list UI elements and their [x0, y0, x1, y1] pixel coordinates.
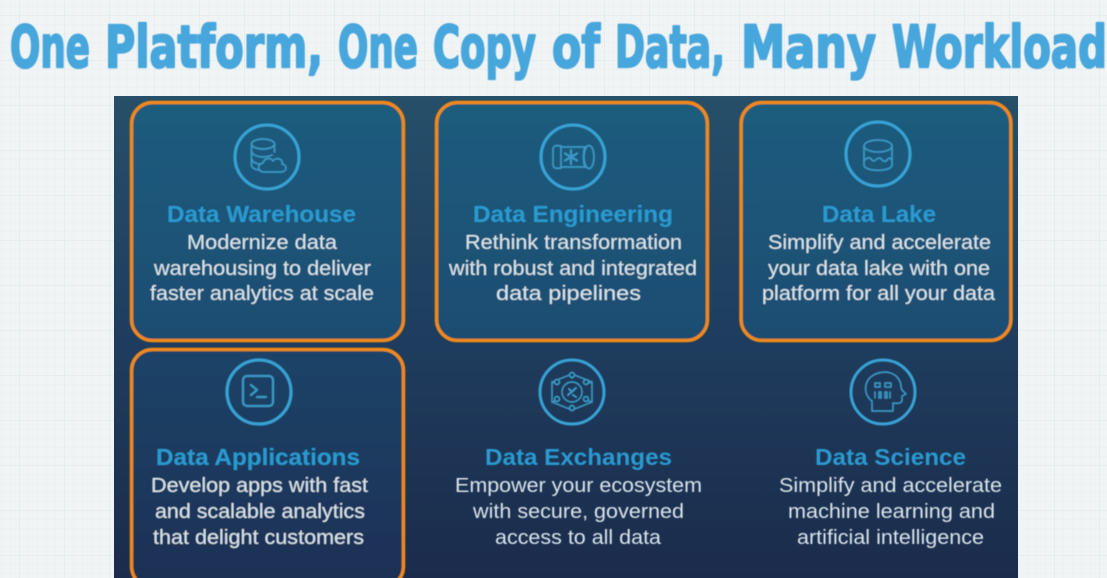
description: Data Science: artificial intelligence [797, 526, 984, 549]
description: Data Warehouse: warehousing to deliver [153, 257, 371, 280]
icon: exchange network [540, 360, 604, 424]
description: Data Engineering: Rethink transformation [465, 231, 682, 254]
title: Many [741, 13, 876, 81]
title: Platform, [105, 13, 323, 81]
heading: Data Lake: Data Lake [822, 201, 936, 227]
description: Data Engineering [448, 231, 697, 305]
title [10, 13, 1107, 81]
card outline: Data Warehouse [132, 102, 404, 340]
title: Copy [433, 13, 536, 81]
title: One [10, 13, 90, 81]
description: Data Lake [762, 231, 996, 305]
description: Data Lake: your data lake with one [768, 257, 990, 280]
description: Data Exchanges: Empower your ecosystem [455, 474, 702, 497]
heading: Data Exchanges: Data Exchanges [485, 444, 672, 470]
title: One [338, 13, 418, 81]
description: Data Science: machine learning and [788, 500, 995, 523]
description: Data Applications [151, 474, 368, 549]
dark slide panel [114, 96, 1018, 578]
icon: terminal prompt [227, 360, 291, 424]
icon: database with cloud [235, 125, 299, 189]
card outline: Data Engineering [436, 102, 708, 340]
panel: Data Warehouse [132, 102, 404, 340]
panel: Data Science [779, 360, 1002, 549]
icon: head with data [851, 360, 915, 424]
heading: Data Science: Data Science [815, 444, 966, 470]
title: Data, [615, 13, 725, 81]
description: Data Exchanges [455, 474, 702, 549]
description: Data Science: Simplify and accelerate [779, 474, 1002, 497]
description: Data Lake: Simplify and accelerate [768, 231, 991, 254]
description: Data Engineering: data pipelines [496, 282, 641, 305]
heading: Data Warehouse: Data Warehouse [167, 201, 356, 227]
icon: pipeline with snowflake [541, 125, 605, 189]
description: Data Science [779, 474, 1002, 549]
description: Data Engineering: with robust and integrated [448, 257, 697, 280]
description: Data Lake: platform for all your data [762, 282, 996, 305]
panel: Data Applications [132, 350, 404, 578]
description: Data Applications: and scalable analytics [155, 500, 365, 523]
description: Data Warehouse [150, 231, 374, 305]
description: Data Exchanges: with secure, governed [472, 500, 684, 523]
card outline: Data Applications [132, 350, 404, 578]
description: Data Applications: that delight customers [153, 526, 364, 549]
panel: Data Exchanges [455, 360, 702, 549]
description: Data Warehouse: faster analytics at scale [150, 282, 374, 305]
heading: Data Engineering: Data Engineering [473, 201, 673, 227]
description: Data Applications: Develop apps with fast [151, 474, 368, 497]
panel: Data Lake [741, 102, 1011, 340]
card outline: Data Lake [741, 102, 1011, 340]
heading: Data Applications: Data Applications [156, 444, 360, 470]
description: Data Warehouse: Modernize data [187, 231, 338, 254]
icon: lake cylinder [846, 122, 910, 186]
panel: Data Engineering [436, 102, 708, 340]
description: Data Exchanges: access to all data [495, 526, 662, 549]
title: of [552, 13, 601, 81]
